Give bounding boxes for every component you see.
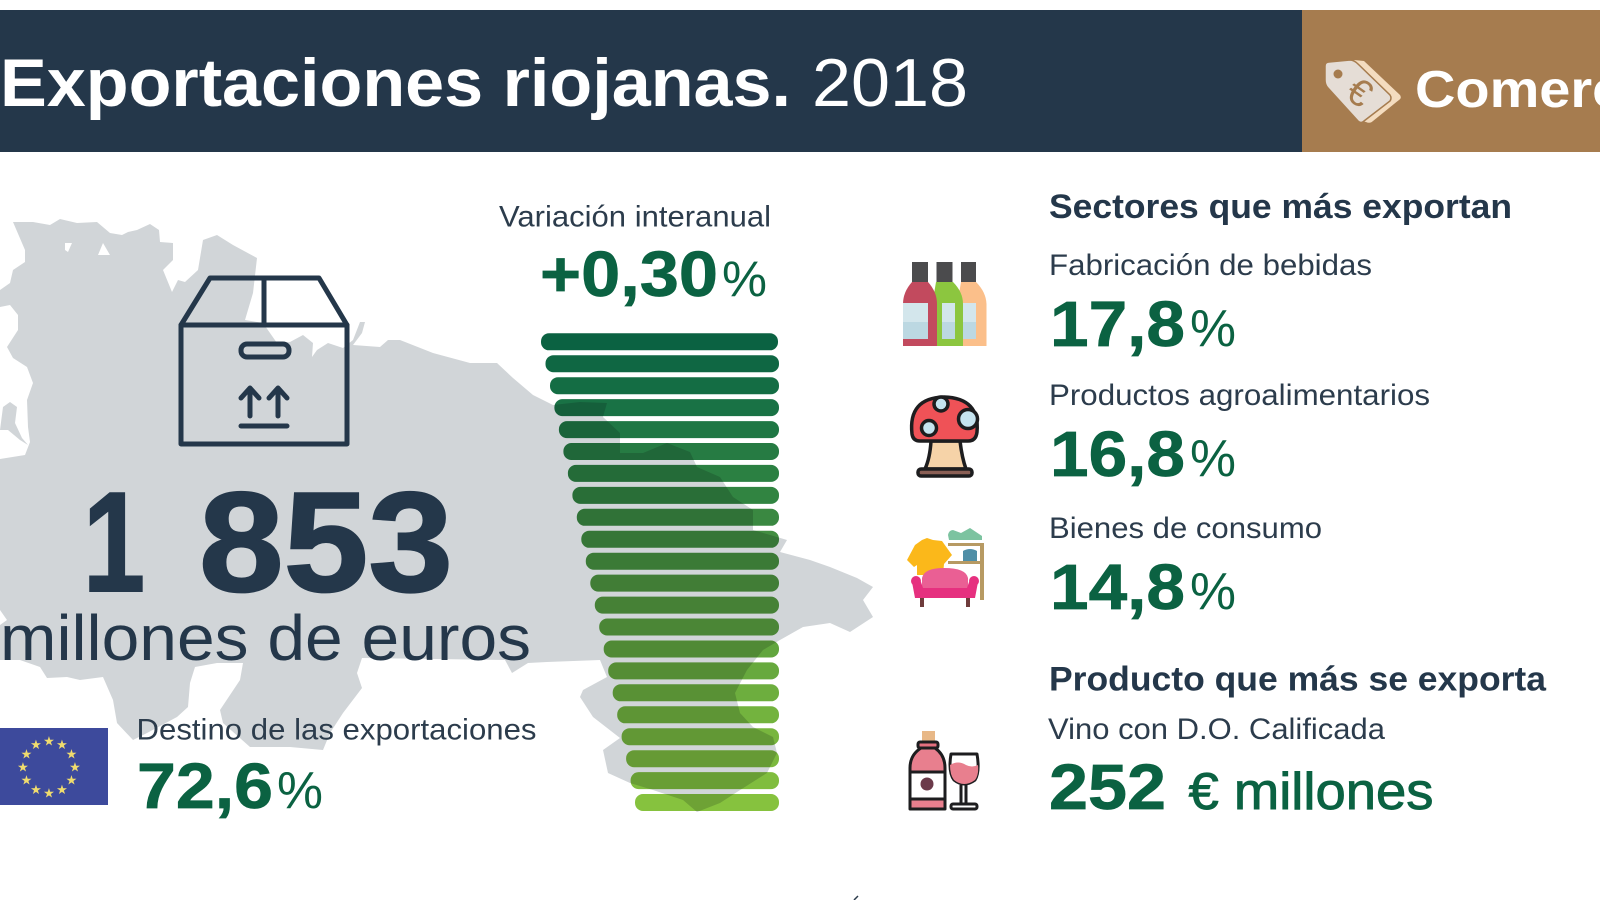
icon: EU flag bbox=[0, 728, 108, 805]
destination label: Destino de las exportaciones bbox=[136, 714, 536, 746]
sector 1 value: 17,8 bbox=[1050, 288, 1185, 360]
header bar bbox=[0, 10, 1600, 152]
icon: EU flag: ★ bbox=[21, 772, 32, 788]
sector 3 label: Bienes de consumo bbox=[1049, 512, 1322, 545]
icon: mushroom bbox=[912, 397, 978, 476]
year-on-year value: % bbox=[722, 251, 767, 307]
total export value: 853 bbox=[199, 463, 453, 622]
heading: sectors: Sectores que más exportan bbox=[1049, 188, 1512, 226]
icon: EU flag: ★ bbox=[30, 782, 42, 797]
heading: top product: Producto que más se exporta bbox=[1049, 660, 1547, 698]
total export value bbox=[83, 463, 453, 622]
sector 1 value: % bbox=[1190, 300, 1236, 358]
icon: EU flag: ★ bbox=[21, 746, 32, 762]
sector 3 value: % bbox=[1190, 563, 1236, 621]
sector 3 value bbox=[1050, 551, 1236, 623]
title: 2018 bbox=[812, 45, 968, 121]
product value: € millones bbox=[1188, 763, 1434, 821]
icon: EU flag: ★ bbox=[56, 782, 68, 797]
icon: EU flag: ★ bbox=[30, 737, 42, 752]
icon: cardboard box bbox=[181, 278, 347, 444]
destination value bbox=[137, 750, 323, 822]
icon: wine bottle and glass bbox=[910, 731, 978, 809]
sector 2 label: Productos agroalimentarios bbox=[1049, 379, 1430, 412]
icon: EU flag: ★ bbox=[17, 760, 29, 774]
icon: EU flag: ★ bbox=[43, 734, 55, 748]
bar graphic bbox=[541, 333, 779, 811]
icon: EU flag: ★ bbox=[66, 772, 77, 788]
map of La Rioja bbox=[0, 219, 873, 812]
icon: EU flag: ★ bbox=[69, 760, 81, 774]
sector 1 value bbox=[1050, 288, 1236, 360]
icon: price tag with euro bbox=[1325, 60, 1401, 123]
icon: EU flag: ★ bbox=[66, 746, 77, 762]
sector 2 value: % bbox=[1190, 430, 1236, 488]
total export value: 1 bbox=[83, 463, 145, 622]
destination value: 72,6 bbox=[137, 750, 273, 822]
sector 2 value bbox=[1050, 418, 1236, 490]
icon: EU flag: ★ bbox=[43, 786, 55, 800]
year-on-year label: Variación interanual bbox=[499, 200, 771, 234]
icon: consumer goods bbox=[907, 528, 984, 607]
sector 3 value: 14,8 bbox=[1050, 551, 1185, 623]
sector 2 value: 16,8 bbox=[1050, 418, 1185, 490]
year-on-year value: +0,30 bbox=[540, 238, 718, 310]
sector 1 label: Fabricación de bebidas bbox=[1049, 249, 1372, 282]
icon: EU flag: ★ bbox=[56, 737, 68, 752]
icon: price tag with euro: € bbox=[1338, 70, 1380, 116]
icon: bottles bbox=[903, 262, 986, 346]
product value bbox=[1049, 751, 1434, 823]
product value: 252 bbox=[1049, 751, 1166, 823]
destination value: % bbox=[277, 762, 323, 820]
title: Exportaciones riojanas. bbox=[0, 45, 791, 121]
unit label: millones de euros bbox=[0, 602, 531, 674]
product label: Vino con D.O. Calificada bbox=[1048, 713, 1385, 746]
